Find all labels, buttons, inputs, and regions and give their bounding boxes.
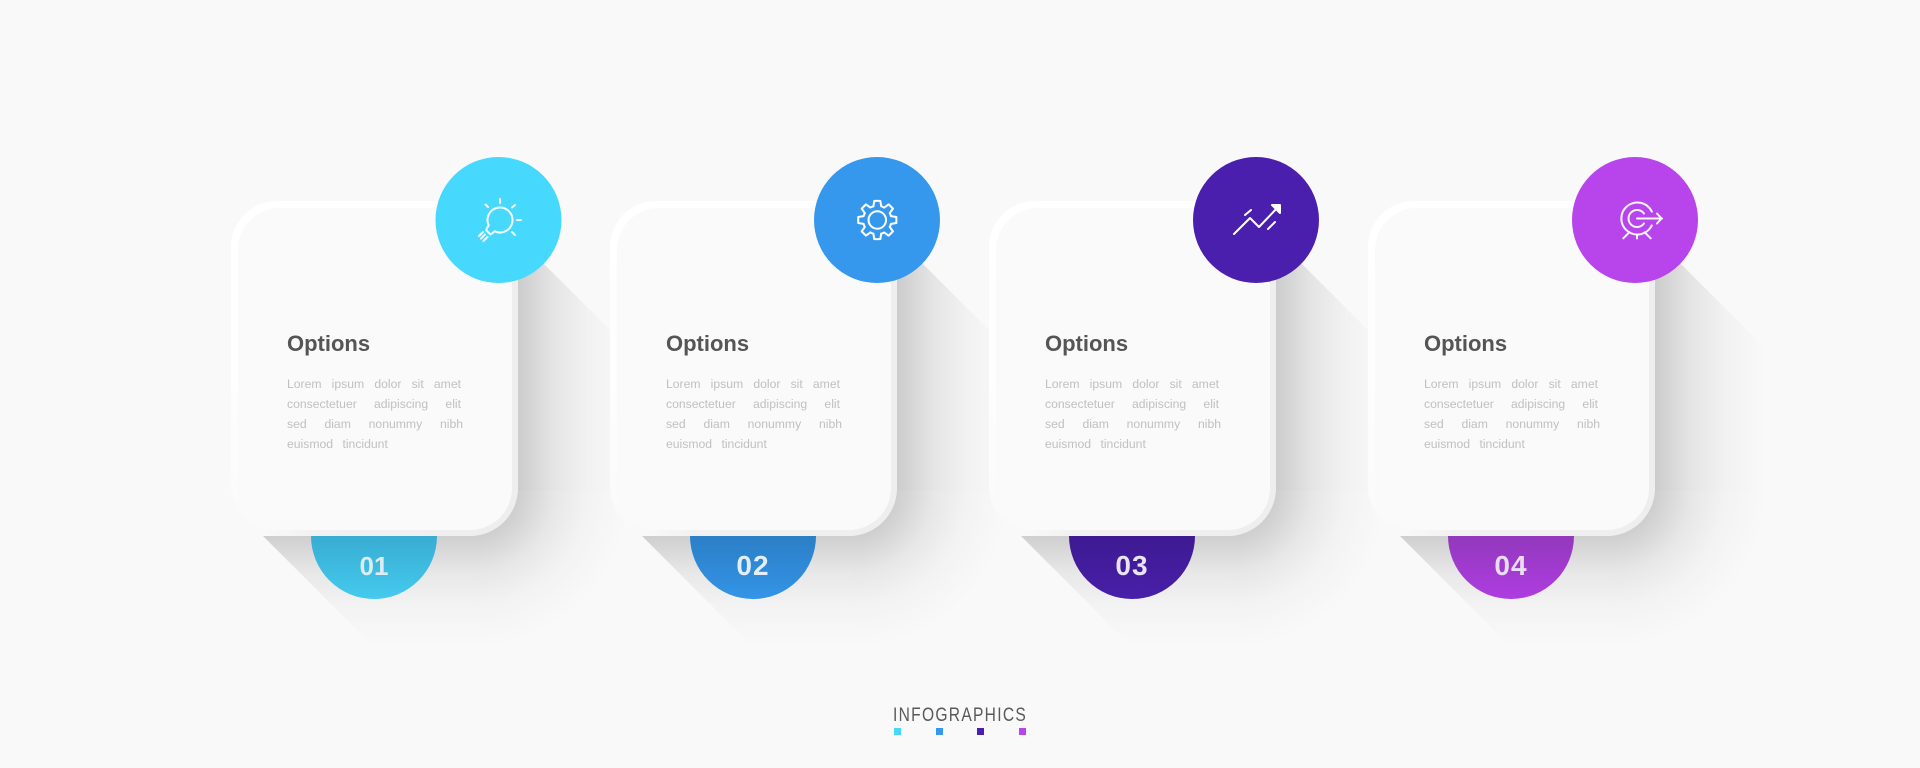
number badge 04: 04: [1494, 550, 1528, 581]
long shadow: [642, 238, 1009, 648]
body text: sed diam nonummy nibh: [287, 417, 463, 431]
long shadow: [1021, 238, 1388, 648]
heading: Options: [1424, 331, 1507, 356]
body text: Lorem ipsum dolor sit amet: [287, 377, 461, 391]
icon badge: gear: [814, 157, 940, 283]
icon badge: light bulb: [436, 157, 562, 283]
card graphics 02: [610, 157, 964, 600]
body text: euismod tincidunt: [1045, 437, 1146, 451]
number badge 01: 01: [360, 551, 388, 581]
card graphics 03: [990, 157, 1343, 600]
card: [989, 201, 1276, 536]
body text: [287, 377, 463, 451]
card graphics 01: [263, 157, 585, 600]
body text: Lorem ipsum dolor sit amet: [1424, 377, 1598, 391]
number badge 04: [1448, 473, 1574, 599]
body text: [1424, 377, 1600, 451]
body text: sed diam nonummy nibh: [666, 417, 842, 431]
card: [1368, 201, 1655, 536]
heading: Options: [287, 331, 370, 356]
number badge 03: [1069, 473, 1195, 599]
panel: option 04: [1368, 157, 1722, 600]
footer title and colour legend: [893, 703, 1026, 735]
body text: sed diam nonummy nibh: [1424, 417, 1600, 431]
body text: consectetuer adipiscing elit: [1045, 397, 1219, 411]
long shadow: [263, 238, 630, 648]
card: [231, 201, 518, 536]
body text: sed diam nonummy nibh: [1045, 417, 1221, 431]
panel: option 01: [263, 157, 585, 600]
body text: euismod tincidunt: [287, 437, 388, 451]
icon badge: trend arrow: [1193, 157, 1319, 283]
panel: option 02: [610, 157, 964, 600]
number badge 01: [311, 473, 437, 599]
legend squares: [894, 728, 1026, 735]
number badge 03: 03: [1115, 550, 1149, 581]
body text: Lorem ipsum dolor sit amet: [666, 377, 840, 391]
body text: euismod tincidunt: [666, 437, 767, 451]
card: [610, 201, 897, 536]
heading: Options: [1045, 331, 1128, 356]
number badge 02: [690, 473, 816, 599]
icon badge: target: [1572, 157, 1698, 283]
body text: consectetuer adipiscing elit: [1424, 397, 1598, 411]
title: INFOGRAPHICS: [893, 703, 1026, 725]
body text: [666, 377, 842, 451]
heading: Options: [666, 331, 749, 356]
body text: [1045, 377, 1221, 451]
body text: consectetuer adipiscing elit: [287, 397, 461, 411]
long shadow: [1400, 238, 1767, 648]
body text: Lorem ipsum dolor sit amet: [1045, 377, 1219, 391]
number badge 02: 02: [736, 550, 770, 581]
body text: euismod tincidunt: [1424, 437, 1525, 451]
panel: option 03: [990, 157, 1343, 600]
body text: consectetuer adipiscing elit: [666, 397, 840, 411]
card graphics 04: [1368, 157, 1722, 600]
